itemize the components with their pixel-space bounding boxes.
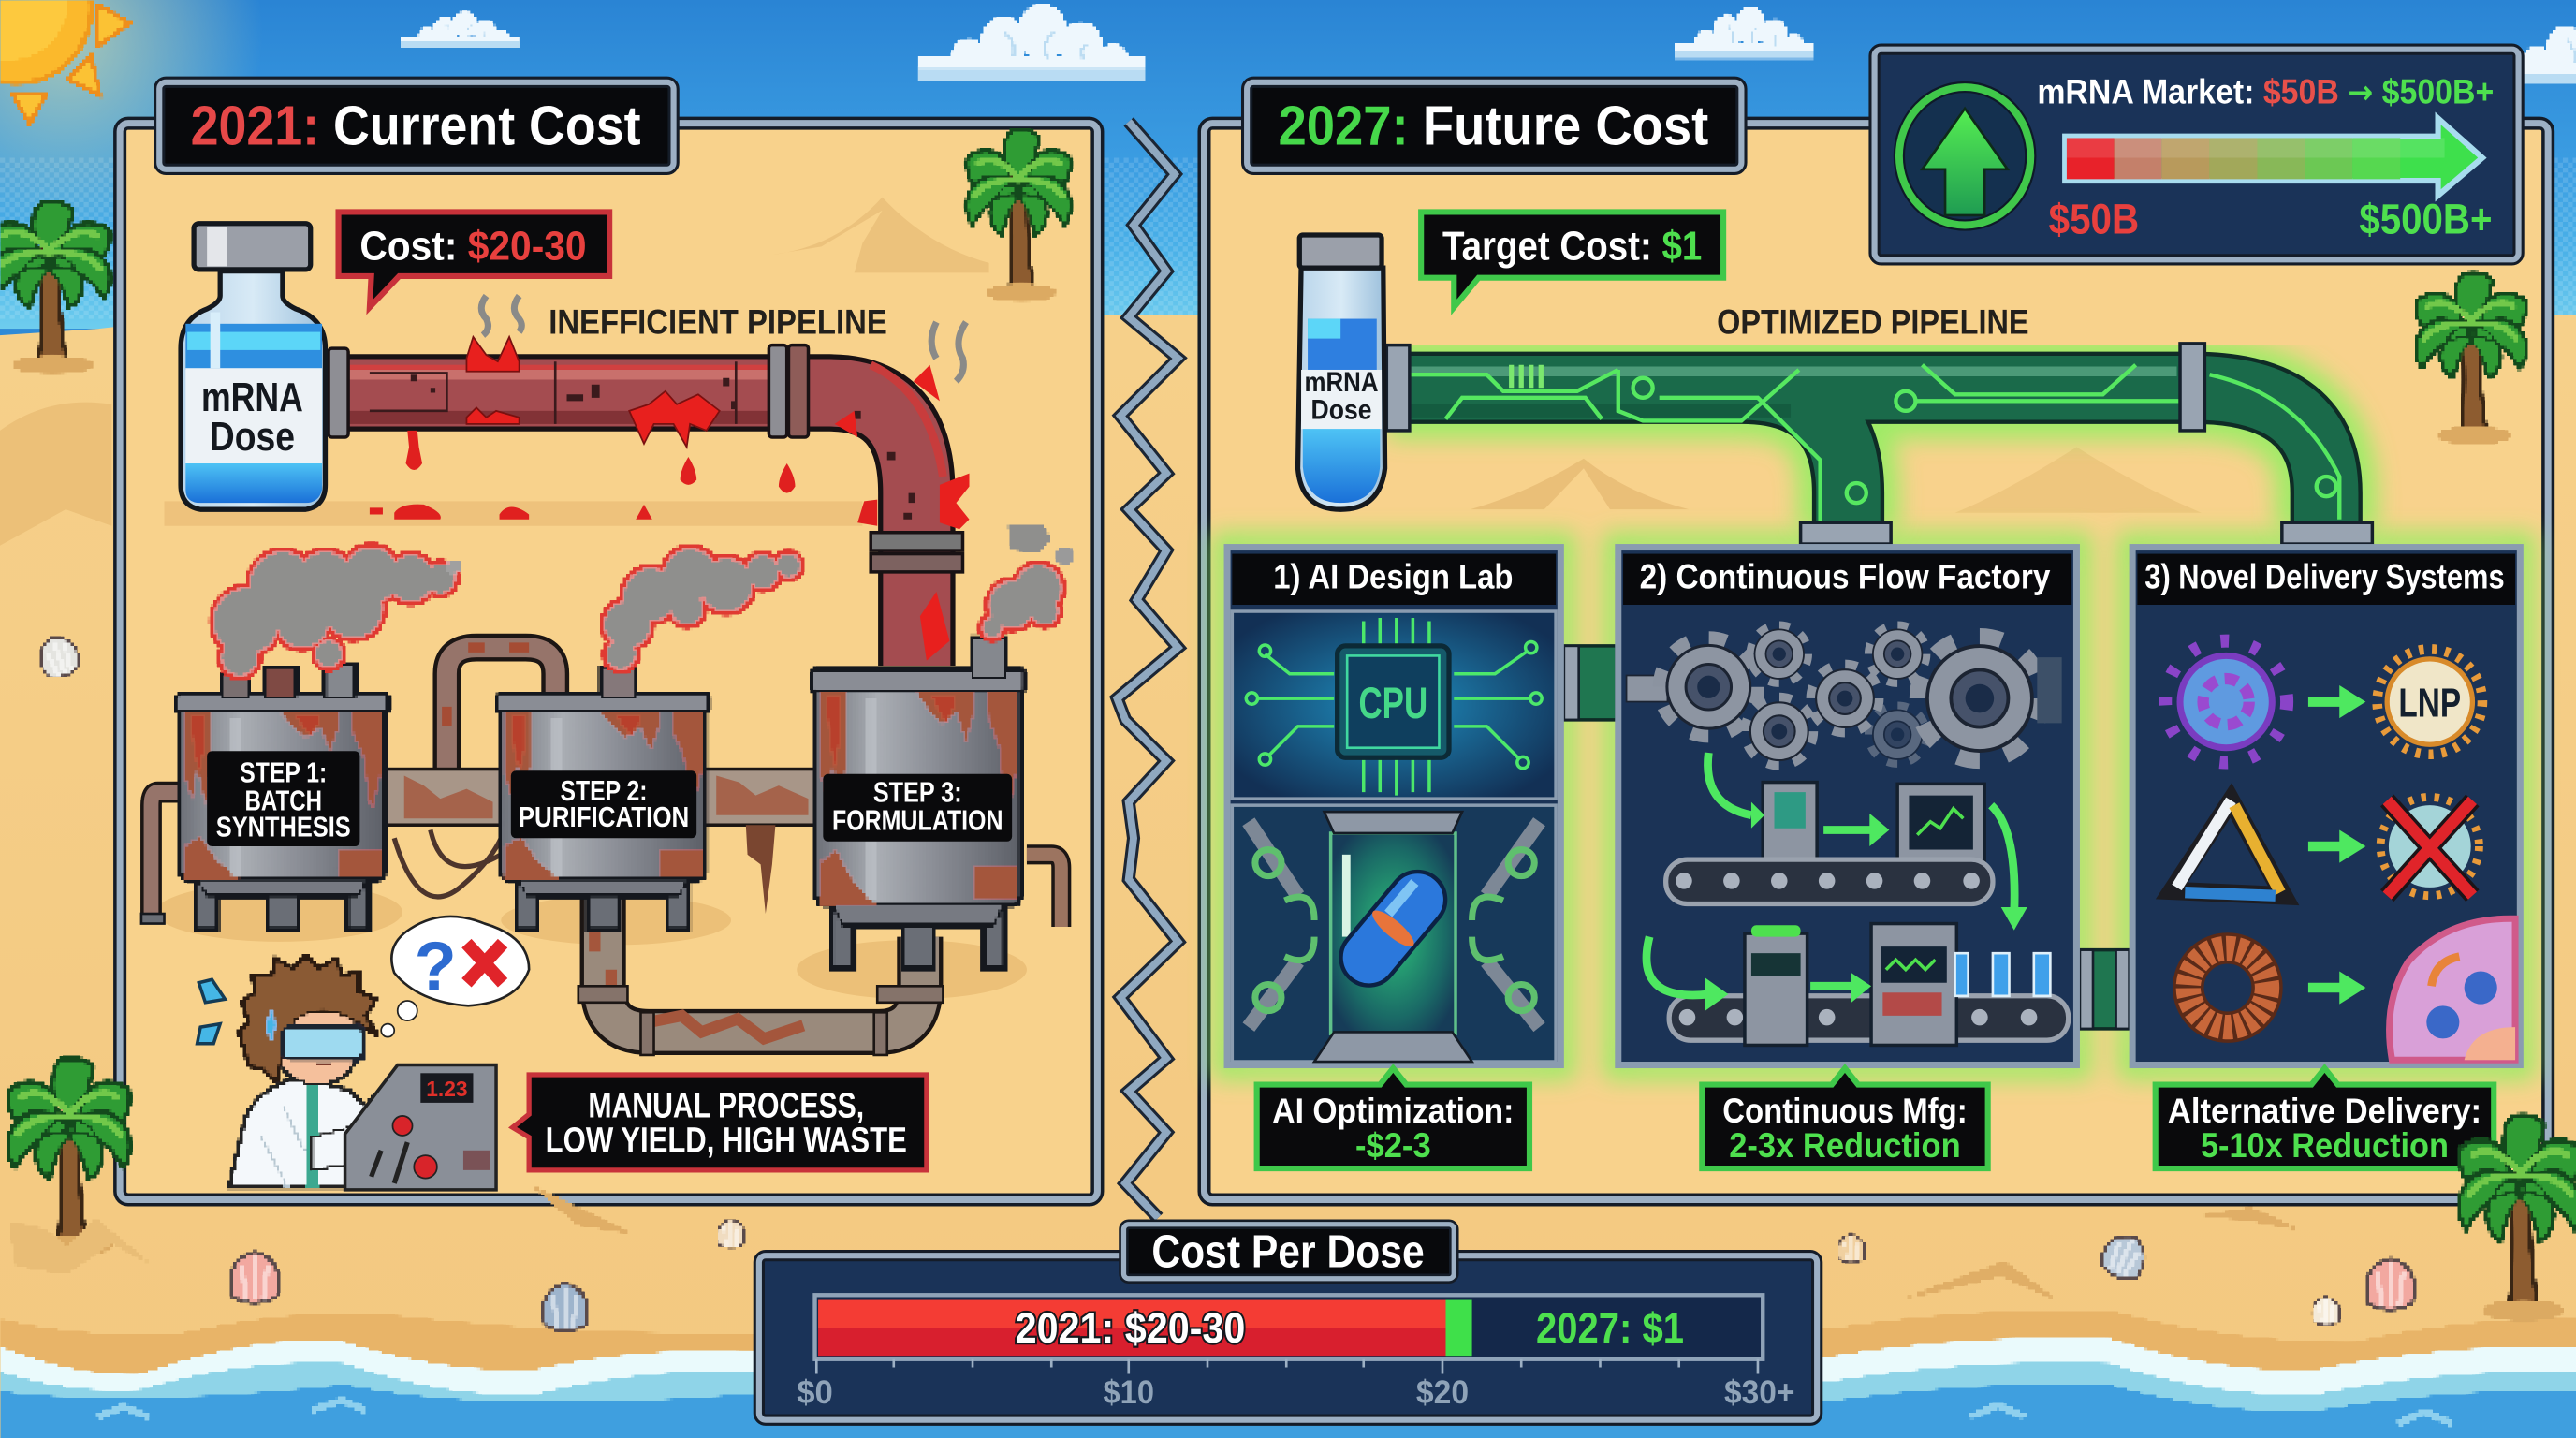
palm tree, lower right <box>2460 1116 2576 1320</box>
vial: mRNA dose <box>181 224 326 509</box>
pipe: left side drain <box>141 792 178 924</box>
palm tree, left panel <box>968 131 1070 301</box>
step 1 label: SYNTHESIS <box>216 811 351 844</box>
label: 500B+: $500B+ <box>2359 195 2492 242</box>
bar: 2027 cost <box>1445 1300 1472 1356</box>
sub-panel glow <box>1224 544 2524 1068</box>
vial: mRNA dose: Dose <box>210 414 295 460</box>
callout: manual process: MANUAL PROCESS, <box>588 1086 864 1125</box>
title: cost per dose: Cost Per Dose <box>1151 1226 1425 1277</box>
callout: cost: Cost: $20-30 <box>359 223 587 269</box>
axis labels <box>797 1374 1794 1411</box>
smoke plume, tank 1 <box>213 548 460 675</box>
title: 2027 future cost <box>1247 82 1741 169</box>
vial: target mRNA dose: Dose <box>1311 395 1372 426</box>
smoke plume, tank 2 <box>605 549 800 668</box>
step 2 label: PURIFICATION <box>519 800 689 833</box>
axis labels: $0 <box>797 1374 833 1411</box>
cloud <box>402 12 518 46</box>
tank: step 2 purification <box>498 668 708 929</box>
tank: step 1 batch synthesis <box>178 664 388 929</box>
step 3 label: STEP 3: <box>873 776 962 809</box>
palm tree, left shore <box>0 203 110 373</box>
step 2 label: STEP 2: <box>560 774 648 807</box>
connector pipe between panels 2 and 3 <box>2080 950 2130 1029</box>
header: 3) Novel Delivery Systems <box>2144 557 2505 595</box>
CPU circuit image <box>1232 611 1556 799</box>
cloud <box>2497 15 2576 82</box>
market heading: mRNA Market: $50B → $500B+ <box>2037 73 2494 112</box>
CPU circuit image: CPU <box>1358 679 1427 728</box>
axis ticks <box>816 1359 1758 1374</box>
step 1 label: STEP 1: <box>240 756 327 789</box>
callout: alternative delivery: 5-10x Reduction <box>2201 1126 2449 1165</box>
sweat drops <box>198 979 225 1044</box>
callout: continuous manufacturing: 2-3x Reduction <box>1729 1126 1961 1165</box>
icon: sun <box>0 0 128 122</box>
background: ocean waves <box>0 1311 2576 1438</box>
callout: continuous manufacturing <box>1702 1068 1988 1168</box>
header: 2) Continuous Flow Factory <box>1640 557 2051 595</box>
connector pipe between panels 1 and 2 <box>1564 646 1617 720</box>
bar frame <box>815 1295 1763 1359</box>
step 1 label: BATCH <box>245 784 322 816</box>
panel: 2027 future cost <box>1204 124 2548 1199</box>
callout: AI optimization: -$2-3 <box>1355 1126 1431 1165</box>
callout: alternative delivery <box>2156 1068 2494 1168</box>
scientist at control console <box>230 957 413 1186</box>
flow line machines and conveyors <box>1647 753 2069 1045</box>
callout: AI optimization <box>1257 1068 1530 1168</box>
cloud <box>920 5 1146 79</box>
zigzag divider <box>1117 122 1178 1218</box>
beach decor: shells and dunes <box>10 1186 2414 1329</box>
pipe: U return under tanks <box>578 896 943 1055</box>
label: inefficient pipeline: INEFFICIENT PIPELINE <box>549 302 887 341</box>
capsule in bioreactor <box>1232 805 1556 1062</box>
palm tree, lower left <box>9 1059 129 1255</box>
vial: target mRNA dose <box>1298 235 1385 509</box>
axis labels: $20 <box>1416 1374 1469 1411</box>
shell <box>36 633 82 681</box>
header <box>2137 554 2515 605</box>
palm tree, right panel <box>2417 273 2525 444</box>
axis labels: $10 <box>1104 1374 1154 1411</box>
header: 1) AI Design Lab <box>1273 557 1513 595</box>
label: optimized pipeline: OPTIMIZED PIPELINE <box>1717 302 2029 341</box>
optimized green pipe <box>1388 365 2339 529</box>
virus to LNP <box>2165 641 2482 763</box>
control console: 1.23 <box>426 1077 468 1101</box>
step 2 label <box>511 770 696 838</box>
callout: continuous manufacturing: Continuous Mfg: <box>1722 1092 1968 1130</box>
callout: manual process: LOW YIELD, HIGH WASTE <box>546 1121 907 1160</box>
vial: mRNA dose: mRNA <box>201 374 303 420</box>
origami delivery to crossed LNP <box>2172 797 2479 896</box>
growth arrow bar <box>2065 118 2482 196</box>
thought bubble with question mark and cross: ? <box>415 927 457 1005</box>
title: 2027 future cost: 2027: Future Cost <box>1278 94 1708 156</box>
vial: target mRNA dose: mRNA <box>1305 367 1379 398</box>
step 3 label: FORMULATION <box>832 803 1003 836</box>
pipe: right side drain <box>1027 855 1061 927</box>
callout: target cost: Target Cost: $1 <box>1442 223 1702 269</box>
icon: up arrow in circle <box>1899 87 2030 225</box>
title: 2021 current cost <box>159 82 674 169</box>
background: beach sand <box>0 315 2576 1438</box>
smoke plume, tank 3 <box>983 526 1073 638</box>
pipe: arch between tanks <box>446 648 555 789</box>
header <box>1232 554 1556 605</box>
title: 2021 current cost: 2021: Current Cost <box>191 94 641 156</box>
callout: manual process <box>513 1075 927 1170</box>
callout: alternative delivery: Alternative Delivery: <box>2168 1092 2481 1130</box>
pipe: hose loop between tanks <box>394 829 501 897</box>
lipid ring to cell <box>2188 918 2515 1060</box>
pipe: connectors between tanks <box>385 770 816 914</box>
panel 1: AI design lab <box>1227 548 1560 1065</box>
control console <box>345 1065 496 1190</box>
chart panel: cost per dose <box>759 1255 1817 1420</box>
panel: mRNA market growth <box>1875 50 2519 259</box>
tank: step 3 formulation <box>813 638 1023 967</box>
value: 2021: 2021: $20-30 <box>1016 1304 1245 1352</box>
step 1 label <box>207 751 359 846</box>
panel: 2021 current cost <box>120 124 1097 1199</box>
bar: 2021 cost <box>818 1300 1445 1356</box>
thought bubble with question mark and cross <box>381 917 529 1037</box>
callout: target cost <box>1421 212 1723 307</box>
gears <box>1627 626 2062 764</box>
value: 2027: 2027: $1 <box>1536 1304 1684 1352</box>
axis labels: $30+ <box>1724 1374 1794 1411</box>
virus to LNP: LNP <box>2398 680 2461 726</box>
step 3 label <box>823 774 1012 842</box>
label: 50B: $50B <box>2049 195 2139 242</box>
panel 2: continuous flow factory <box>1618 548 2076 1065</box>
callout: AI optimization: AI Optimization: <box>1272 1092 1514 1130</box>
background: sky and horizon sea <box>0 0 2576 329</box>
panel 3: novel delivery systems <box>2132 548 2520 1065</box>
header <box>1623 554 2071 605</box>
cloud <box>1676 7 1814 58</box>
inefficient pipe with leaks <box>329 296 970 666</box>
pipe flanges <box>1386 344 2372 544</box>
callout: cost <box>339 212 609 307</box>
